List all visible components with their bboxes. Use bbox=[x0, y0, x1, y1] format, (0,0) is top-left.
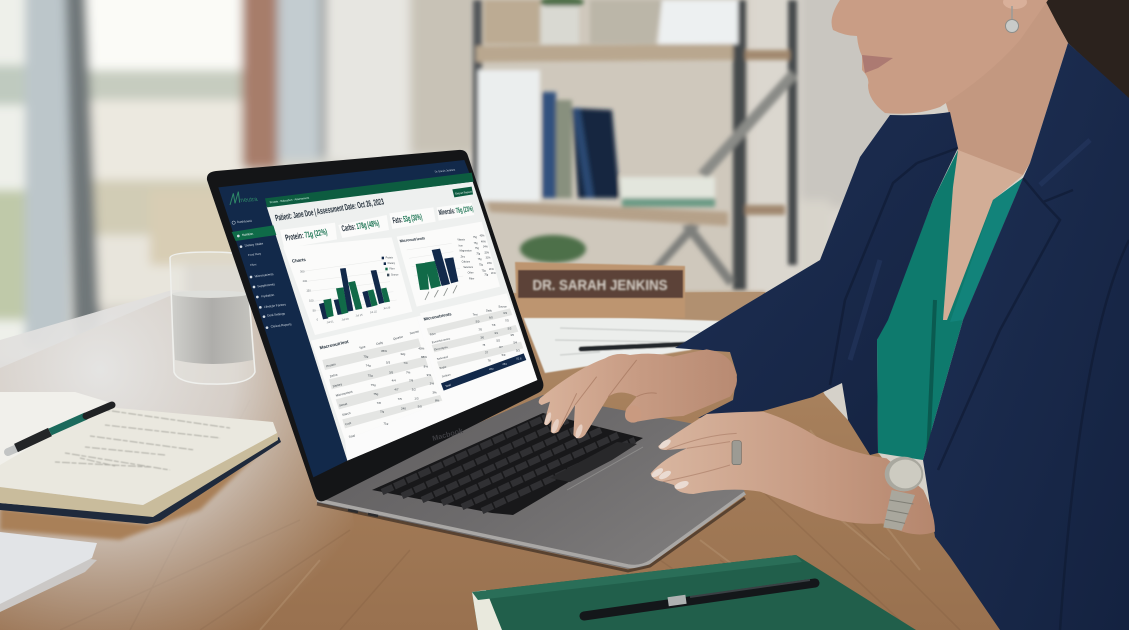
table: micronutrients: 5/9 bbox=[502, 353, 506, 357]
sidebar navigation: Dietary Intake bbox=[244, 241, 264, 248]
table: micronutrients: 7/5 bbox=[505, 319, 509, 323]
panel: micronutrient chart right: 23% bbox=[487, 263, 492, 265]
table: micronutrients: 5/4 bbox=[513, 340, 518, 344]
table: macronutrients: Zebra bbox=[329, 372, 338, 378]
table: macronutrients: Macronutrient bbox=[319, 339, 350, 350]
window glare on desk bbox=[0, 290, 370, 630]
table: macronutrients: Cost bbox=[345, 421, 352, 426]
table: micronutrients: 3/1 bbox=[494, 331, 499, 335]
laptop bbox=[207, 150, 745, 571]
table: macronutrients: 9% bbox=[427, 373, 431, 377]
panel: micronutrient chart right: 32% bbox=[484, 252, 489, 254]
table: micronutrients: Saturated bbox=[436, 355, 449, 361]
legend: Source bbox=[391, 273, 399, 276]
table: micronutrients: 78 bbox=[488, 358, 491, 362]
metric card: minerals: Minerals: 75g (23%) bbox=[438, 204, 474, 217]
panel: charts left: 200 bbox=[303, 279, 308, 283]
panel: micronutrient chart right: 21% bbox=[491, 273, 496, 275]
table: macronutrients: 71g bbox=[383, 422, 389, 426]
table: macronutrients: 45% bbox=[418, 346, 425, 350]
hair bbox=[1040, 0, 1129, 100]
table: micronutrients: 5/3 bbox=[516, 348, 520, 352]
table: macronutrients: Micronutrient bbox=[335, 390, 353, 398]
panel: micronutrient chart right: Micronutrients bbox=[399, 236, 426, 243]
neck and chest bbox=[943, 0, 1068, 320]
panel: charts left: Jul 08 bbox=[341, 317, 349, 322]
pen on document bbox=[581, 344, 690, 349]
total row bbox=[441, 353, 526, 391]
bookshelf bbox=[473, 0, 797, 290]
panel: micronutrient chart right: 75g bbox=[476, 254, 481, 256]
panel: charts left: Jul 01 bbox=[326, 319, 334, 324]
shelf boards bbox=[476, 44, 733, 62]
USB ports bbox=[348, 510, 378, 516]
panel: micronutrient chart right: Iron bbox=[459, 245, 463, 248]
table: macronutrients: Protein bbox=[326, 362, 336, 368]
panel: charts left: 300 bbox=[300, 269, 305, 273]
panel: micronutrient chart right: Fiber bbox=[469, 277, 475, 280]
legend bbox=[382, 256, 399, 276]
trackpad edge bbox=[567, 447, 643, 490]
table: micronutrients: 37 bbox=[485, 350, 488, 354]
panel: micronutrient chart right: Other bbox=[468, 272, 474, 275]
metric card: carbs: Carbs: 178g (48%) bbox=[340, 218, 380, 233]
logo bbox=[230, 192, 259, 205]
table: micronutrients: 3/7 bbox=[499, 345, 503, 349]
panel: micronutrient chart right: 75g bbox=[474, 243, 478, 245]
name plate: Dr. Sarah Jenkins: DR. SARAH JENKINS bbox=[532, 277, 668, 294]
table: micronutrients: Fiber bbox=[429, 331, 436, 337]
panel: charts left: 0 bbox=[317, 318, 319, 322]
panel: charts left bbox=[283, 237, 412, 335]
left hand on keyboard bbox=[539, 349, 737, 439]
window frames bbox=[25, 0, 69, 348]
laptop lid bbox=[207, 150, 543, 501]
sidebar navigation: Dashboard bbox=[236, 219, 253, 224]
table: macronutrients: Starch bbox=[342, 411, 351, 417]
sidebar navigation bbox=[232, 219, 293, 329]
table: macronutrients: 7/4 bbox=[403, 361, 408, 365]
metric card: protein bbox=[280, 223, 337, 249]
earring bbox=[1006, 6, 1018, 32]
sidebar navigation: Clinical Reports bbox=[270, 322, 293, 329]
table: macronutrients: 4/4 bbox=[392, 379, 396, 383]
water glass bbox=[170, 252, 255, 384]
panel: charts left: Jul 22 bbox=[370, 309, 378, 314]
table: macronutrients: 5/3 bbox=[386, 360, 390, 364]
table: macronutrients: Sweet bbox=[339, 402, 348, 408]
total row: 283 bbox=[502, 362, 507, 366]
sidebar navigation: Fiber bbox=[250, 262, 257, 267]
metric card: carbs bbox=[338, 215, 389, 238]
legend: Protein bbox=[386, 256, 394, 259]
laptop base bbox=[317, 395, 745, 569]
table: macronutrients: 240 bbox=[401, 406, 406, 410]
table: micronutrients: 3/5 bbox=[510, 333, 515, 337]
table: macronutrients: 7/8 bbox=[377, 401, 381, 405]
table: macronutrients: 8% bbox=[435, 399, 440, 403]
keyboard bbox=[372, 413, 643, 515]
table: macronutrients: 1/3 bbox=[414, 396, 419, 400]
table: micronutrients: Source bbox=[498, 304, 507, 308]
document on desk bbox=[522, 314, 752, 373]
open notebook with pen bbox=[0, 392, 281, 524]
panel: micronutrient chart right: 75g bbox=[478, 259, 482, 261]
table: macronutrients: 8% bbox=[424, 364, 428, 368]
pen on notebook bbox=[8, 405, 112, 452]
table: micronutrients: Electrolytes bbox=[434, 345, 449, 352]
warm strip under notebook bbox=[0, 450, 262, 540]
panel: micronutrient chart right: Vitamin bbox=[457, 239, 466, 242]
table: micronutrients: Daily bbox=[486, 308, 493, 312]
table: micronutrients: 75 bbox=[482, 343, 486, 347]
total row: Total bbox=[445, 383, 452, 388]
table: macronutrients: 5/0 bbox=[418, 404, 422, 408]
green notebook with pen bbox=[472, 555, 916, 630]
logo: neutra bbox=[240, 196, 259, 204]
panel: charts left: 150 bbox=[306, 289, 311, 293]
panel: micronutrient chart right: 75g bbox=[473, 237, 478, 239]
pen bbox=[584, 580, 815, 616]
sidebar navigation: Supplements bbox=[257, 282, 276, 288]
table: macronutrients: 7/5 bbox=[398, 397, 402, 401]
legend: Dietary bbox=[388, 262, 396, 265]
brand mark: Macbook bbox=[431, 425, 465, 443]
header user label: Dr Sarah Jenkins bbox=[434, 168, 456, 174]
total row: 283 bbox=[489, 367, 494, 371]
lapel seams bbox=[830, 148, 1129, 630]
panel: charts left: Charts bbox=[291, 257, 307, 264]
face bbox=[832, 0, 1048, 114]
table: macronutrients: Source bbox=[409, 329, 420, 335]
panel: micronutrient chart right: 75g bbox=[484, 274, 489, 276]
metric card: minerals bbox=[437, 203, 474, 221]
total row: 81.6 bbox=[516, 356, 522, 360]
sidebar navigation: Hydration bbox=[261, 293, 275, 298]
fingernails bbox=[544, 405, 641, 439]
panel: micronutrient chart right: 34% bbox=[483, 246, 488, 248]
table: micronutrients: 6/3 bbox=[503, 311, 508, 315]
panel: micronutrient chart right: 46% bbox=[481, 242, 486, 244]
handwriting bbox=[55, 410, 230, 470]
panel: micronutrient chart right: 75g bbox=[482, 270, 486, 272]
table: macronutrients: Daily bbox=[376, 340, 384, 346]
panel: micronutrient chart right: Zinc bbox=[461, 256, 466, 258]
blazer left sleeve and shoulder bbox=[675, 112, 958, 455]
table: macronutrients: 3% bbox=[432, 390, 437, 394]
table: macronutrients: 75g bbox=[373, 392, 379, 396]
table: macronutrients: 7/g bbox=[380, 410, 384, 414]
books bbox=[478, 70, 540, 201]
table: macronutrients bbox=[311, 317, 442, 440]
table: micronutrients: 5/0 bbox=[476, 320, 480, 324]
sidebar navigation: Food Diary bbox=[247, 251, 262, 257]
table: micronutrients: 7/8 bbox=[492, 323, 496, 327]
table: micronutrients: Essential amino bbox=[431, 336, 451, 344]
metric card: protein: Protein: 71g (22%) bbox=[284, 227, 328, 243]
bars bbox=[416, 249, 458, 290]
table: macronutrients: Total bbox=[348, 433, 356, 439]
table: macronutrients: 7/9 bbox=[409, 379, 413, 383]
panel: micronutrient chart right: Magnesium bbox=[460, 250, 472, 252]
panel: charts left: Jul 29 bbox=[383, 305, 391, 310]
table: micronutrients: 5/2 bbox=[496, 338, 501, 342]
table: macronutrients: Quarter bbox=[393, 335, 403, 341]
panel: charts left: Jul 15 bbox=[355, 313, 363, 318]
panel: micronutrient chart right: Calcium bbox=[462, 262, 470, 264]
legend: Fiber bbox=[389, 267, 395, 270]
content area bbox=[267, 182, 537, 461]
table: macronutrients: 35% bbox=[381, 349, 387, 353]
name plate: Dr. Sarah Jenkins bbox=[515, 262, 685, 318]
table: macronutrients: 75g bbox=[368, 374, 373, 378]
bars bbox=[319, 268, 390, 319]
export button bbox=[452, 187, 473, 197]
table: macronutrients: 3/2 bbox=[412, 388, 416, 392]
window scenery bbox=[0, 0, 38, 363]
stacked books bbox=[620, 177, 715, 199]
blazer right front bbox=[923, 43, 1129, 630]
pale wall bbox=[326, 0, 410, 163]
sidebar navigation: Goal Settings bbox=[266, 312, 286, 318]
table: macronutrients: 75g bbox=[371, 383, 376, 387]
table: macronutrients: Type bbox=[359, 344, 366, 350]
panel: charts left: 50 bbox=[313, 308, 316, 312]
table: micronutrients: 7/5 bbox=[478, 328, 483, 332]
green breadcrumb bar: Protein · Education · Assessment bbox=[269, 196, 310, 204]
lips bbox=[862, 55, 893, 73]
table: macronutrients: 75g bbox=[363, 354, 369, 358]
plant on shelf bbox=[520, 235, 586, 263]
table: macronutrients: 2% bbox=[430, 382, 434, 386]
green breadcrumb bar bbox=[265, 173, 474, 207]
table: macronutrients: 4/7 bbox=[394, 388, 399, 392]
table: micronutrients bbox=[420, 293, 527, 391]
navy header and sidebar bbox=[218, 160, 473, 477]
table: macronutrients: Dietary bbox=[332, 382, 343, 388]
woman in navy blazer bbox=[539, 0, 1129, 630]
panel: micronutrient chart right: 21% bbox=[489, 269, 494, 271]
panel: micronutrient chart right: 75g bbox=[479, 264, 484, 266]
right hand and forearm bbox=[650, 412, 935, 534]
blouse bbox=[877, 150, 1023, 460]
metric card: fats: Fats: 53g (30%) bbox=[391, 212, 423, 225]
brick bbox=[242, 0, 278, 168]
laptop display, drawn in zoomed coordinates bbox=[218, 160, 537, 477]
sidebar navigation: Lifestyle Factors bbox=[263, 302, 287, 309]
table: micronutrients: Micronutrients bbox=[423, 311, 453, 322]
fingernails bbox=[650, 438, 690, 491]
panel: micronutrient chart right: 75g bbox=[475, 248, 480, 250]
table: micronutrients: 5/3 bbox=[508, 326, 512, 330]
panel: charts left: 100 bbox=[309, 299, 314, 303]
panel: micronutrient chart right: 45% bbox=[480, 236, 484, 238]
table: micronutrients: Test bbox=[473, 313, 478, 317]
table: macronutrients: 88% bbox=[421, 355, 427, 359]
sidebar navigation: Nutrition bbox=[241, 232, 254, 237]
loose papers bottom left bbox=[0, 532, 97, 612]
wristwatch bbox=[883, 457, 923, 531]
table: macronutrients: 32g bbox=[400, 352, 406, 356]
ring bbox=[732, 441, 741, 465]
panel: micronutrient chart right: 31% bbox=[486, 257, 490, 259]
wooden desk bbox=[0, 290, 1010, 630]
table: macronutrients: 7% bbox=[406, 370, 411, 374]
table: micronutrients: 3/0 bbox=[480, 336, 485, 340]
table: macronutrients: 74g bbox=[366, 364, 371, 368]
sidebar navigation: Micronutrients bbox=[254, 272, 274, 278]
table: micronutrients: Sugar bbox=[439, 365, 447, 370]
table: micronutrients: Sodium bbox=[441, 372, 452, 378]
table: macronutrients: 3/5 bbox=[389, 370, 393, 374]
panel: micronutrient chart right bbox=[397, 222, 500, 307]
panel: micronutrient chart right: Selenium bbox=[463, 267, 473, 269]
table: micronutrients: 6/0 bbox=[489, 316, 493, 320]
export button: Export Report bbox=[455, 190, 473, 196]
metric card: fats bbox=[389, 207, 436, 229]
patient heading: Patient: Jane Doe | Assessment Date: Oct 26, 2023 bbox=[274, 196, 385, 223]
